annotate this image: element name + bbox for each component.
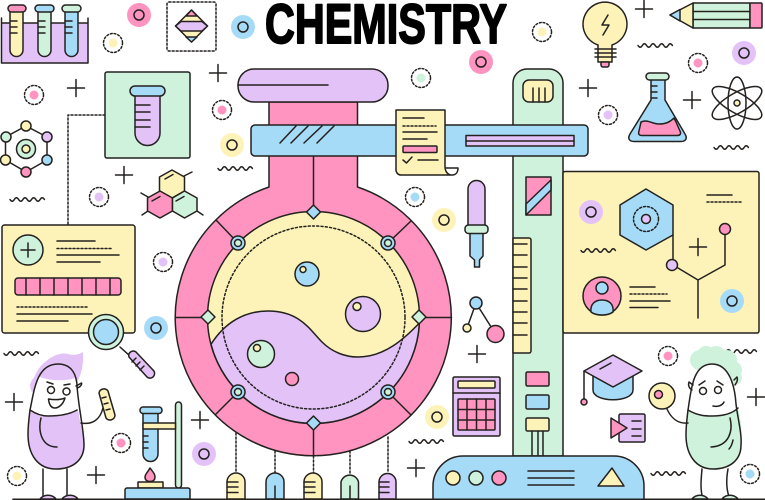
icon: atom xyxy=(708,77,765,129)
icon: hexagon molecule xyxy=(0,121,52,177)
icon: calculator xyxy=(453,377,500,436)
right tower xyxy=(513,69,563,456)
panel: left yellow card xyxy=(2,225,135,333)
document note xyxy=(396,110,458,175)
ring dots xyxy=(127,3,756,466)
panel: right yellow card xyxy=(563,172,759,333)
icon: honeycomb molecule xyxy=(141,170,203,218)
right character xyxy=(649,346,742,499)
icon: graduation cap xyxy=(581,355,642,405)
dotted connector xyxy=(68,115,105,224)
icon: light bulb xyxy=(583,2,627,67)
flask cap xyxy=(238,69,388,102)
icon: erlenmeyer flask xyxy=(629,73,686,142)
lab stand with burner xyxy=(125,402,190,499)
icon: magnifier xyxy=(88,314,155,378)
ground line xyxy=(13,498,765,500)
icon: video card xyxy=(611,414,645,442)
test tube rack xyxy=(2,5,88,63)
dotted drain lines xyxy=(236,433,388,473)
flask xyxy=(175,102,452,456)
icon: striped diamond xyxy=(167,2,216,51)
bottom capsules xyxy=(227,473,396,499)
icon: pipette xyxy=(465,180,488,267)
panel: test tube card xyxy=(105,72,190,158)
horizontal blue bar xyxy=(251,125,588,156)
left character xyxy=(28,352,115,499)
icon: three-node molecule xyxy=(463,297,504,342)
bottom control unit xyxy=(433,456,644,500)
icon: pencil xyxy=(670,3,762,28)
